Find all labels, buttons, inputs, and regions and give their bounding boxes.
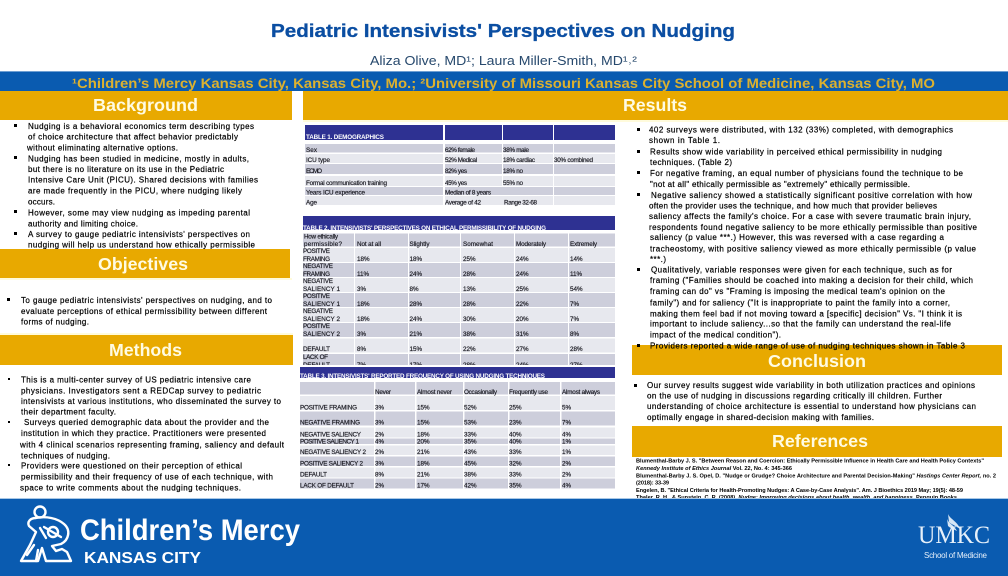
table 1: demographics: 82% yes bbox=[445, 168, 467, 175]
table 2: ethical permissibility: 28% bbox=[463, 362, 476, 369]
table 2: ethical permissibility: 28% bbox=[463, 301, 476, 308]
text block: background: Nudging has been studied in medicine, mostly in adults, bbox=[28, 154, 249, 164]
table 2: ethical permissibility: 54% bbox=[570, 286, 583, 293]
text block: results: framing ("Families should be coached into making a decision for their child, which bbox=[650, 276, 973, 285]
icon: parent holding child bbox=[21, 506, 71, 561]
table 3: reported frequency: 42% bbox=[464, 482, 477, 490]
text block: results: saliency affects the family's choice. For a case with severe traumatic brain injury, bbox=[649, 212, 971, 221]
logo: UMKC School of Medicine: School of Medicine bbox=[924, 551, 988, 560]
table 2: ethical permissibility: 18% bbox=[357, 301, 370, 308]
text block: objectives bbox=[7, 296, 273, 326]
table 3: reported frequency: NEGATIVE FRAMING bbox=[300, 420, 360, 426]
text block: results: family") and for saliency ("It is inappropriate to paint the family into a corner, bbox=[650, 298, 950, 308]
table 2: ethical permissibility: 24% bbox=[410, 316, 423, 323]
table 1: demographics: 18% cardiac bbox=[503, 157, 535, 164]
table 3: reported frequency: 23% bbox=[509, 420, 522, 426]
text block: background: occurs. bbox=[28, 198, 55, 206]
text block: methods: institution in which they practice. Practitioners were presented bbox=[21, 429, 266, 438]
text block: methods: techniques of nudging. bbox=[21, 452, 110, 460]
table 3: reported frequency: 21% bbox=[417, 472, 430, 478]
table 2: ethical permissibility: NEGATIVE bbox=[303, 263, 333, 270]
table 2: ethical permissibility: FRAMING bbox=[303, 256, 330, 263]
text block: objectives: evaluate perceptions of ethical permissibility between different bbox=[21, 307, 268, 316]
text block: background: are made frequently in the PICU, where nudging likely bbox=[28, 186, 242, 196]
text block: background: nudging will help us understand how ethically permissible bbox=[28, 240, 256, 250]
text block: results: important to include saliency...so that the family can understand the real-life bbox=[650, 320, 952, 328]
table 1: demographics: 38% male bbox=[503, 147, 529, 154]
table 3: reported frequency: 1% bbox=[562, 438, 572, 446]
logo: Children's Mercy: KANSAS CITY bbox=[84, 550, 202, 567]
text block: objectives: forms of nudging. bbox=[21, 318, 89, 326]
table 3: reported frequency: 35% bbox=[509, 482, 522, 490]
text block: results: Negative saliency showed a statistically significant positive correlation with how bbox=[651, 191, 972, 200]
table 2: ethical permissibility: NEGATIVE bbox=[303, 278, 333, 285]
table 3: reported frequency: NEGATIVE SALIENCY bbox=[300, 432, 362, 438]
table 2: ethical permissibility: POSITIVE bbox=[303, 323, 330, 330]
text block: objectives: To gauge pediatric intensivists' perspectives on nudging, and to bbox=[21, 296, 273, 305]
table 1: demographics: ICU type bbox=[306, 157, 330, 164]
text block: references: Blumenthal-Barby J. S. Opel, D. "Nudge or Grudge? Choice Architecture and Parental Decision-Making" Hastings Center Report, no. 2 bbox=[636, 474, 996, 480]
table 3: reported frequency: 2% bbox=[375, 432, 385, 438]
table 2: ethical permissibility: SALIENCY 2 bbox=[303, 331, 340, 338]
text block: conclusion: on the use of nudging in discussions regarding critically ill children. Further bbox=[647, 392, 942, 400]
text block: conclusion bbox=[634, 381, 976, 422]
logo: Children's Mercy: Children’s Mercy bbox=[80, 514, 300, 547]
table 2: ethical permissibility: FRAMING bbox=[303, 271, 330, 278]
table 2: ethical permissibility: 7% bbox=[570, 316, 580, 323]
text block: results: shown in Table 1. bbox=[649, 136, 720, 145]
heading: methods bbox=[0, 333, 293, 365]
text block: methods: permissibility and their frequency of use of each technique, with bbox=[21, 472, 273, 482]
table 1: demographics: Median of 8 years bbox=[445, 190, 491, 196]
text block: conclusion: understanding of choice architecture is essential to understand how physicians can bbox=[647, 402, 976, 411]
heading: methods: Methods bbox=[109, 340, 182, 360]
table 2: ethical permissibility: NEGATIVE bbox=[303, 308, 333, 315]
table 2: ethical permissibility: POSITIVE bbox=[303, 248, 330, 255]
table 3: reported frequency: LACK OF DEFAULT bbox=[300, 482, 354, 490]
text block: results: tracheostomy, with positive saliency viewed as more ethically permissible (p value bbox=[650, 244, 977, 254]
text block: conclusion: Our survey results suggest wide variability in both utilization practices and opinions bbox=[647, 381, 975, 390]
table 3: reported frequency: 3% bbox=[375, 460, 385, 468]
table 2: ethical permissibility: TABLE 2. INTENSIVISTS' PERSPECTIVES ON ETHICAL PERMISSIBILITY OF NUDGING bbox=[303, 225, 546, 232]
table 3: reported frequency: Never bbox=[375, 389, 391, 396]
table 3: reported frequency: POSITIVE FRAMING bbox=[300, 404, 357, 412]
table 2: ethical permissibility: 28% bbox=[463, 271, 476, 278]
text block: methods: their department faculty. bbox=[21, 408, 116, 416]
table 3: reported frequency: 32% bbox=[509, 460, 522, 468]
table 2: ethical permissibility: 25% bbox=[516, 286, 529, 293]
table 2: ethical permissibility: 21% bbox=[410, 331, 423, 338]
table 2: ethical permissibility: 18% bbox=[357, 256, 370, 263]
table 2: ethical permissibility: permissible? bbox=[304, 241, 342, 248]
table 2: ethical permissibility: 18% bbox=[357, 316, 370, 323]
table 2: ethical permissibility: LACK OF bbox=[303, 354, 328, 361]
table 3: reported frequency: Almost always bbox=[562, 389, 600, 396]
table 3: reported frequency: 38% bbox=[464, 472, 477, 478]
table 3: reported frequency: 18% bbox=[417, 432, 430, 438]
table 2: ethical permissibility: 8% bbox=[410, 286, 419, 293]
text block: results: respondents found negative saliency to be more ethically permissible than positive bbox=[649, 223, 978, 232]
text block: references bbox=[636, 458, 996, 501]
text block: methods: This is a multi-center survey of US pediatric intensive care bbox=[21, 376, 252, 384]
table 3: reported frequency: 40% bbox=[509, 432, 522, 438]
text block: background: Nudging is a behavioral economics term describing types bbox=[28, 122, 254, 131]
table 3: reported frequency: 15% bbox=[417, 420, 430, 426]
table 2: ethical permissibility: DEFAULT bbox=[303, 346, 330, 353]
table 3: reported frequency: 25% bbox=[509, 404, 522, 412]
table 1: demographics: Sex bbox=[306, 147, 318, 154]
table 2: ethical permissibility: 28% bbox=[570, 346, 583, 353]
table 2: ethical permissibility: 27% bbox=[516, 346, 529, 353]
table 3: reported frequency: 35% bbox=[464, 438, 477, 446]
text block: background: authority and limiting choice. bbox=[28, 220, 138, 228]
text block: background: but there is no literature on its use in the Pediatric bbox=[28, 165, 224, 174]
text block: background: However, some may view nudging as impeding parental bbox=[28, 208, 250, 218]
icon: flame bbox=[947, 514, 961, 531]
table 3: reported frequency: TABLE 3. INTENSIVISTS' REPORTED FREQUENCY OF USING NUDGING TECHNIQUES bbox=[300, 373, 545, 380]
logo: Children's Mercy bbox=[21, 506, 300, 567]
table 2: ethical permissibility: 24% bbox=[516, 271, 529, 278]
heading: objectives: Objectives bbox=[98, 254, 188, 274]
table 2: ethical permissibility: 11% bbox=[570, 271, 583, 278]
table 2: ethical permissibility: 13% bbox=[463, 286, 476, 293]
text block: background: of choice architecture that affect behavior predictably bbox=[28, 132, 238, 142]
table 3: reported frequency: 18% bbox=[417, 460, 430, 468]
text block: results: For negative framing, an equal number of physicians found the technique to be bbox=[650, 169, 964, 178]
text block: references: Kennedy Institute of Ethics Journal Vol. 22, No. 4: 345-366 bbox=[636, 466, 792, 472]
text block: background: A survey to gauge pediatric intensivists' perspectives on bbox=[28, 230, 250, 239]
table 2: ethical permissibility: 8% bbox=[570, 331, 580, 338]
table 3: reported frequency: 43% bbox=[464, 449, 477, 456]
affiliation band: ¹Children’s Mercy Kansas City, Kansas City, Mo.; ²University of Missouri Kansas City School of Medicine, Kansas City, MO bbox=[72, 75, 935, 91]
table 3: reported frequency: 33% bbox=[509, 472, 522, 478]
heading: conclusion bbox=[632, 345, 1002, 375]
table 2: ethical permissibility: 27% bbox=[570, 362, 583, 369]
table 2: ethical permissibility: 18% bbox=[410, 256, 423, 263]
table 2: ethical permissibility: 22% bbox=[516, 301, 529, 308]
text block: references: (2018): 33-39 bbox=[636, 480, 669, 486]
table 2: ethical permissibility: 15% bbox=[410, 346, 423, 353]
text block: references: Engelen, B. "Ethical Criteria for Health-Promoting Nudges: A Case-by-Case Analysis". Am. J Bioethics 2019 May; 19(5): 48-59 bbox=[636, 488, 963, 494]
table 3: reported frequency: 5% bbox=[562, 404, 572, 412]
text block: methods: Surveys queried demographic data about the provider and the bbox=[24, 418, 270, 427]
table 2: ethical permissibility: 17% bbox=[410, 362, 423, 369]
table 3: reported frequency: 8% bbox=[375, 472, 385, 478]
table 3: reported frequency: 2% bbox=[562, 472, 572, 478]
table 3: reported frequency: POSITIVE SALIENCY 1 bbox=[300, 438, 359, 446]
text block: results: "not at all" ethically permissible as "extremely" ethically permissible. bbox=[650, 180, 910, 189]
table 2: ethical permissibility: DEFAULT bbox=[303, 362, 330, 369]
text block: results: Results show wide variability in perceived ethical permissibility in nudging bbox=[650, 148, 942, 156]
text block: results: Providers reported a wide range of use of nudging techniques shown in Table 3 bbox=[650, 342, 966, 350]
table 2: ethical permissibility: 8% bbox=[357, 346, 367, 353]
text block: results: 402 surveys were distributed, with 132 (33%) completed, with demographics bbox=[649, 126, 953, 134]
table 1: demographics: Formal communication training bbox=[306, 180, 387, 187]
heading: background: Background bbox=[93, 95, 198, 115]
table 1: demographics: 30% combined bbox=[554, 157, 593, 164]
table 3: reported frequency: POSITIVE SALIENCY 2 bbox=[300, 460, 363, 468]
table 3: reported frequency: 52% bbox=[464, 404, 477, 412]
table 2: ethical permissibility: SALIENCY 1 bbox=[303, 286, 340, 293]
heading: objectives bbox=[0, 249, 292, 280]
text block: conclusion: optimally engage in shared-decision making with families. bbox=[647, 413, 874, 422]
table 1: demographics: 45% yes bbox=[445, 180, 467, 187]
table 2: ethical permissibility: 11% bbox=[357, 271, 370, 278]
heading: conclusion: Conclusion bbox=[768, 351, 866, 371]
table 3: reported frequency: 1% bbox=[562, 449, 572, 456]
table 2: ethical permissibility: Somewhat bbox=[463, 241, 493, 248]
text block: methods: Providers were questioned on their perception of ethical bbox=[21, 462, 242, 470]
table 3: reported frequency: 2% bbox=[375, 482, 385, 490]
table 3: reported frequency bbox=[300, 365, 615, 490]
table 1: demographics: 55% no bbox=[503, 180, 523, 187]
table 3: reported frequency: 2% bbox=[375, 449, 385, 456]
heading: references: References bbox=[772, 431, 868, 451]
table 1: demographics bbox=[305, 125, 615, 206]
table 3: reported frequency: Frequently use bbox=[509, 389, 548, 396]
table 2: ethical permissibility: 24% bbox=[516, 362, 529, 369]
text block: methods: with 4 clinical scenarios representing framing, saliency and default bbox=[19, 440, 285, 450]
table 1: demographics: ECMO bbox=[306, 168, 322, 175]
table 1: demographics: 52% Medical bbox=[445, 157, 477, 164]
table 1: demographics: 62% female bbox=[445, 147, 475, 154]
text block: results: ***.) bbox=[650, 255, 666, 264]
heading: background bbox=[0, 91, 292, 120]
logo: UMKC School of Medicine: UMKC bbox=[918, 522, 990, 549]
table 2: ethical permissibility: Not at all bbox=[357, 241, 381, 248]
table 2: ethical permissibility: 14% bbox=[570, 256, 583, 263]
table 1: demographics: 18% no bbox=[503, 168, 523, 175]
text block: results: often the provider uses the technique, and how much that provider believes bbox=[649, 202, 937, 210]
table 2: ethical permissibility: 28% bbox=[410, 301, 423, 308]
table 2: ethical permissibility: 7% bbox=[570, 301, 580, 308]
table 3: reported frequency: 33% bbox=[509, 449, 522, 456]
authors: Aliza Olive, MD¹; Laura Miller-Smith, MD¹˒² bbox=[370, 53, 638, 68]
text block: methods: space to write comments about the nudging techniques. bbox=[20, 484, 241, 492]
text block: background bbox=[14, 122, 258, 250]
table 2: ethical permissibility: SALIENCY 2 bbox=[303, 316, 340, 323]
text block: references: Thaler, R. H., & Sunstein, C. R. (2008). Nudge: Improving decisions about health, wealth, and happiness. Penguin Books bbox=[636, 495, 957, 501]
table 3: reported frequency: 45% bbox=[464, 460, 477, 468]
table 2: ethical permissibility: 22% bbox=[463, 346, 476, 353]
table 3: reported frequency: 40% bbox=[509, 438, 522, 446]
table 3: reported frequency: 33% bbox=[464, 432, 477, 438]
table 3: reported frequency: 53% bbox=[464, 420, 477, 426]
table 3: reported frequency: NEGATIVE SALIENCY 2 bbox=[300, 449, 366, 456]
table 1: demographics: Range 32-68 bbox=[504, 200, 537, 206]
table 2: ethical permissibility: Moderately bbox=[516, 241, 547, 248]
table 2: ethical permissibility: 3% bbox=[357, 331, 367, 338]
affiliation band bbox=[0, 71, 1008, 91]
logo: UMKC School of Medicine bbox=[918, 514, 990, 560]
title: Pediatric Intensivists' Perspectives on Nudging bbox=[271, 20, 735, 41]
table 2: ethical permissibility: Slightly bbox=[410, 241, 430, 248]
table 3: reported frequency: 3% bbox=[375, 404, 385, 412]
table 1: demographics: Age bbox=[306, 200, 317, 206]
table 3: reported frequency: 3% bbox=[375, 420, 385, 426]
text block: methods bbox=[8, 376, 285, 492]
table 2: ethical permissibility: 24% bbox=[410, 271, 423, 278]
table 3: reported frequency: 4% bbox=[562, 432, 572, 438]
table 3: reported frequency: 4% bbox=[375, 438, 385, 446]
text block: background: Intensive Care Unit (PICU). Shared decisions with families bbox=[28, 176, 258, 184]
table 3: reported frequency: 15% bbox=[417, 404, 430, 412]
text block: results: impact of the medical condition"). bbox=[650, 330, 781, 340]
table 2: ethical permissibility: 25% bbox=[463, 256, 476, 263]
table 2: ethical permissibility: How ethically bbox=[304, 234, 339, 240]
text block: results: saliency (p value ***.) However, this was reversed with a case regarding a bbox=[650, 233, 945, 242]
footer band bbox=[0, 498, 1008, 576]
table 2: ethical permissibility: 38% bbox=[463, 331, 476, 338]
text block: results: techniques. (Table 2) bbox=[650, 158, 732, 167]
text block: results bbox=[637, 126, 978, 350]
table 3: reported frequency: Occasionally bbox=[464, 389, 498, 396]
table 3: reported frequency: 20% bbox=[417, 438, 430, 446]
text block: results: framing can do" vs "Framing is imposing the medical team's opinion on the bbox=[650, 287, 946, 296]
table 2: ethical permissibility: SALIENCY 1 bbox=[303, 301, 340, 308]
table 1: demographics: Years ICU experience bbox=[306, 190, 365, 196]
heading: results bbox=[303, 91, 1008, 120]
table 3: reported frequency: 2% bbox=[562, 460, 572, 468]
table 2: ethical permissibility: Extremely bbox=[570, 241, 598, 248]
text block: methods: physicians. Investigators sent a REDCap survey to pediatric bbox=[21, 386, 261, 396]
table 3: reported frequency: 4% bbox=[562, 482, 572, 490]
table 1: demographics: Average of 42 bbox=[445, 200, 481, 206]
text block: background: without eliminating alternative options. bbox=[26, 144, 178, 152]
table 2: ethical permissibility: 31% bbox=[516, 331, 529, 338]
text block: methods: intensivists at various institutions, who disseminated the survey to bbox=[21, 397, 282, 406]
table 2: ethical permissibility: POSITIVE bbox=[303, 293, 330, 300]
text block: results: making them feel bad if not moving toward a [specific] decision" Vs. "I think it is bbox=[650, 310, 962, 318]
table 3: reported frequency: 7% bbox=[562, 420, 572, 426]
heading: references bbox=[632, 426, 1002, 457]
table 3: reported frequency: 17% bbox=[417, 482, 430, 490]
table 1: demographics: TABLE 1. DEMOGRAPHICS bbox=[306, 134, 384, 141]
table 2: ethical permissibility: 3% bbox=[357, 286, 367, 293]
table 2: ethical permissibility bbox=[303, 216, 615, 369]
table 3: reported frequency: DEFAULT bbox=[300, 472, 327, 478]
table 2: ethical permissibility: 7% bbox=[357, 362, 367, 369]
table 2: ethical permissibility: 30% bbox=[463, 316, 476, 323]
table 2: ethical permissibility: 24% bbox=[516, 256, 529, 263]
table 3: reported frequency: 21% bbox=[417, 449, 430, 456]
text block: references: Blumenthal-Barby J. S. "Between Reason and Coercion: Ethically Permissible Influence in Health Care and Health Policy Contexts" bbox=[636, 458, 984, 464]
heading: results: Results bbox=[623, 95, 687, 115]
table 3: reported frequency: Almost never bbox=[417, 389, 452, 396]
text block: results: Qualitatively, variable responses were given for each technique, such as for bbox=[651, 266, 952, 274]
table 2: ethical permissibility: 20% bbox=[516, 316, 529, 323]
